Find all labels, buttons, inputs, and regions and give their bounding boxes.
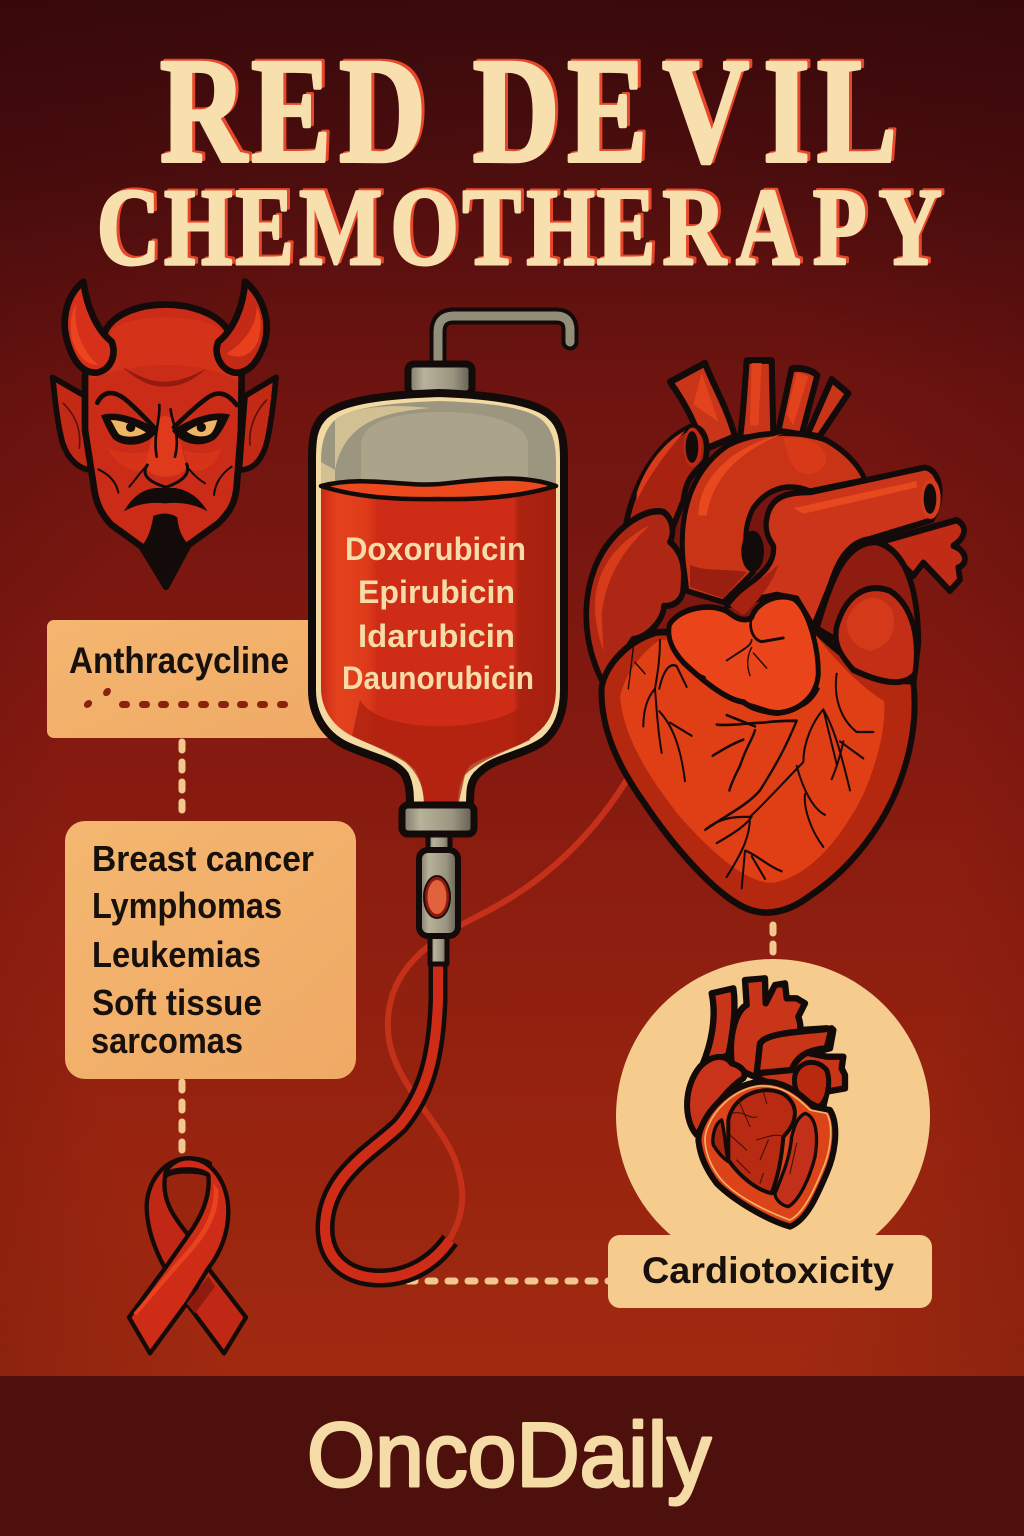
title line: CHEMOTHERAPY: CHEMOTHERAPY — [100, 164, 945, 286]
heart: right atrium lobes — [586, 511, 684, 683]
small heart: right atrium — [687, 1057, 745, 1135]
heart: rear left chamber — [817, 542, 918, 685]
heart: aortic arch — [682, 433, 865, 602]
iv drip chamber and collar — [402, 805, 474, 964]
icon: awareness ribbon — [129, 1158, 246, 1353]
heart vessels: top branches — [670, 361, 848, 450]
devil horns — [65, 282, 267, 373]
iv bag — [312, 316, 570, 1278]
heart: ventricle face — [620, 636, 884, 883]
cancer type: breast cancer: Breast cancer — [92, 838, 314, 879]
title — [97, 26, 945, 288]
iv top cap — [408, 364, 472, 394]
iv liquid — [321, 486, 556, 806]
cardiotoxicity panel — [608, 959, 932, 1308]
devil brows and creases — [63, 393, 267, 495]
drug: doxorubicin: Doxorubicin — [345, 531, 526, 567]
connector: dashed lines — [182, 742, 773, 1281]
label text: Cardiotoxicity: Cardiotoxicity — [642, 1250, 894, 1291]
heart: pulmonary veins at right — [880, 520, 965, 591]
drug: daunorubicin: Daunorubicin — [342, 660, 534, 696]
heart: rear vena cava tube — [625, 427, 707, 534]
drug: epirubicin: Epirubicin — [358, 574, 515, 610]
cancer type: lymphomas: Lymphomas — [92, 885, 282, 926]
devil ears — [53, 377, 276, 470]
title line: RED DEVIL: RED DEVIL — [163, 26, 900, 192]
label text: Anthracycline: Anthracycline — [69, 640, 289, 681]
drug names — [342, 531, 534, 696]
label: Cardiotoxicity — [608, 1235, 932, 1308]
devil mustache — [124, 488, 207, 511]
cancer type: leukemias: Leukemias — [92, 934, 261, 975]
icon: small heart with chambers — [687, 978, 845, 1227]
heart: dark gap — [741, 531, 764, 572]
label box: Anthracycline — [47, 620, 337, 738]
devil eyes — [101, 413, 230, 445]
devil face — [85, 305, 242, 587]
devil face highlights — [90, 317, 237, 477]
iv hook — [438, 316, 570, 362]
heart: coronary veins — [628, 617, 873, 888]
heart: front lobes — [669, 597, 818, 713]
footer band — [0, 1376, 1024, 1536]
title line: CHEMOTHERAPY: CHEMOTHERAPY — [97, 166, 942, 288]
dotted line inside label — [82, 686, 288, 710]
devil head icon — [53, 282, 276, 587]
ribbon front band — [129, 1158, 228, 1353]
heart: pulmonary trunk — [727, 467, 940, 627]
drug: idarubicin: Idarubicin — [358, 618, 515, 654]
small heart: inner chambers — [728, 1090, 795, 1193]
heart: main ventricle rim — [602, 629, 915, 913]
heart: left auricle — [836, 588, 917, 682]
connector: thin red line from heart to tube — [388, 778, 628, 1242]
circle background — [616, 959, 930, 1273]
footer brand: OncoDaily: OncoDaily — [307, 1405, 711, 1506]
ribbon back band — [147, 1158, 246, 1353]
iv bag body — [312, 393, 564, 806]
panel: cancer types — [65, 821, 356, 1079]
devil forehead fold — [122, 367, 207, 387]
heart highlights on vessels — [693, 363, 808, 425]
cancer type: sarcomas: sarcomas — [91, 1020, 243, 1061]
devil goatee — [140, 514, 190, 587]
small heart: ventricles — [698, 1082, 835, 1227]
title line: RED DEVIL: RED DEVIL — [160, 28, 897, 194]
cancer type: soft tissue: Soft tissue — [92, 982, 262, 1023]
iv liquid surface — [321, 478, 556, 499]
iv tube — [325, 955, 450, 1278]
large anatomical heart — [586, 361, 965, 913]
iv bag air space — [321, 401, 556, 490]
